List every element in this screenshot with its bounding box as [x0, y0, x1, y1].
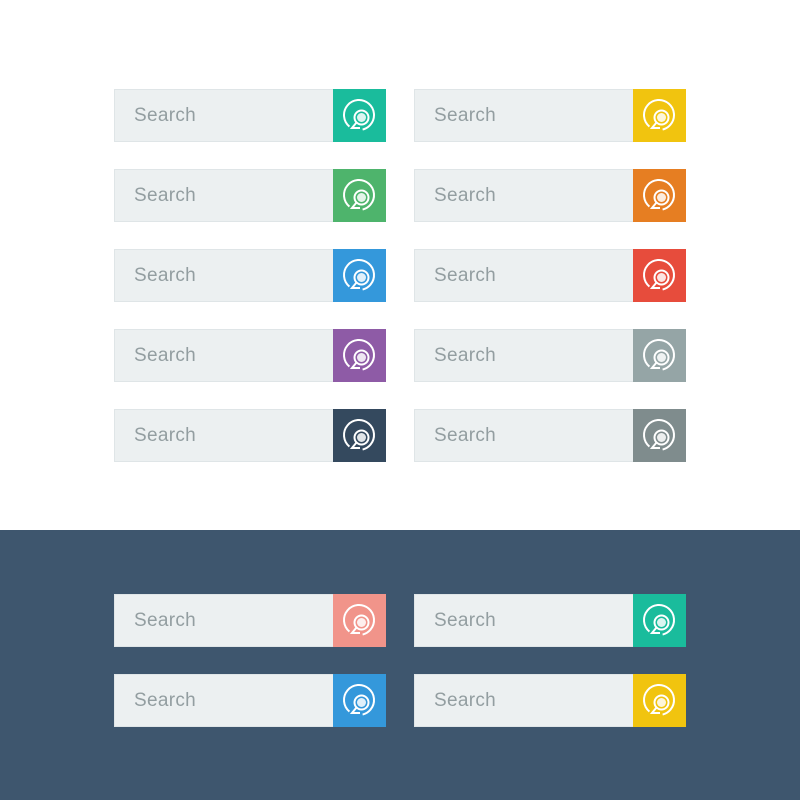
search bar 8 gray: Search [434, 345, 496, 366]
search bar 4 orange [414, 169, 686, 222]
search bar 8 gray [414, 329, 686, 382]
search bar 11 salmon: Search [134, 610, 196, 631]
search bar 3 green [114, 169, 386, 222]
search bar 6 red [414, 249, 686, 302]
search bar 3 green: Search [134, 185, 196, 206]
search bar 10 dark gray [414, 409, 686, 462]
search bar 14 yellow [414, 674, 686, 727]
search bar 7 purple: Search [134, 345, 196, 366]
search bar 7 purple [114, 329, 386, 382]
search bar 12 teal [414, 594, 686, 647]
search bar 14 yellow: Search [434, 690, 496, 711]
search bar 9 navy: Search [134, 425, 196, 446]
dark band [0, 530, 800, 800]
search bar 10 dark gray: Search [434, 425, 496, 446]
search bar 11 salmon [114, 594, 386, 647]
search bar 13 blue: Search [134, 690, 196, 711]
search bar 9 navy [114, 409, 386, 462]
search bar 5 blue [114, 249, 386, 302]
search bar 2 yellow [414, 89, 686, 142]
search bar 5 blue: Search [134, 265, 196, 286]
search bar 13 blue [114, 674, 386, 727]
search bar 1 teal: Search [134, 105, 196, 126]
search bar 1 teal [114, 89, 386, 142]
search bar 4 orange: Search [434, 185, 496, 206]
search bar 2 yellow: Search [434, 105, 496, 126]
search bar 6 red: Search [434, 265, 496, 286]
search bar 12 teal: Search [434, 610, 496, 631]
